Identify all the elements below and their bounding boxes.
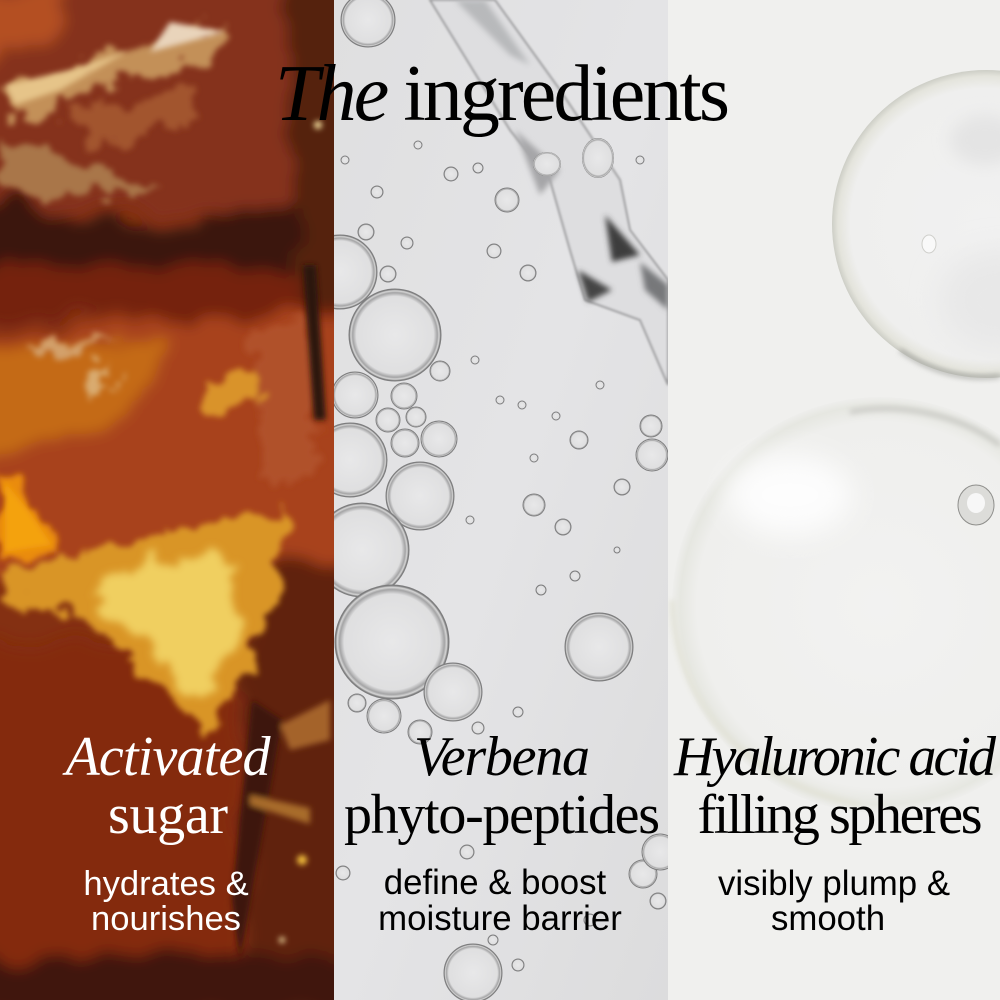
text block: hyaluronic acid filling spheres: smooth [771, 899, 885, 938]
text block: verbena phyto-peptides: moisture barrier [378, 899, 622, 938]
text block: verbena phyto-peptides: phyto-peptides [344, 784, 660, 846]
icon: upper sphere [832, 70, 1000, 378]
panel: hyaluronic acid [668, 0, 1000, 1000]
icon: lower sphere [672, 397, 1000, 813]
panel: verbena phyto-peptides [334, 0, 668, 1000]
text block: activated sugar: nourishes [91, 900, 241, 938]
text block: hyaluronic acid filling spheres: filling spheres [698, 784, 982, 846]
text block: activated sugar: Activated [62, 726, 272, 788]
text block: activated sugar: sugar [108, 784, 228, 846]
text block: activated sugar [62, 726, 272, 938]
text block: verbena phyto-peptides [344, 726, 660, 938]
text block: activated sugar: hydrates & [83, 865, 249, 903]
text block: verbena phyto-peptides: define & boost [384, 863, 607, 902]
text block: hyaluronic acid filling spheres: Hyaluronic acid [673, 726, 997, 788]
text block: hyaluronic acid filling spheres [673, 726, 997, 938]
text block: verbena phyto-peptides: Verbena [414, 726, 590, 788]
bubble cluster [334, 0, 668, 1000]
title: The ingredients [275, 50, 730, 138]
text block: hyaluronic acid filling spheres: visibly plump & [718, 864, 950, 903]
icon: water stream [430, 0, 668, 385]
panel: activated sugar [0, 0, 370, 1000]
